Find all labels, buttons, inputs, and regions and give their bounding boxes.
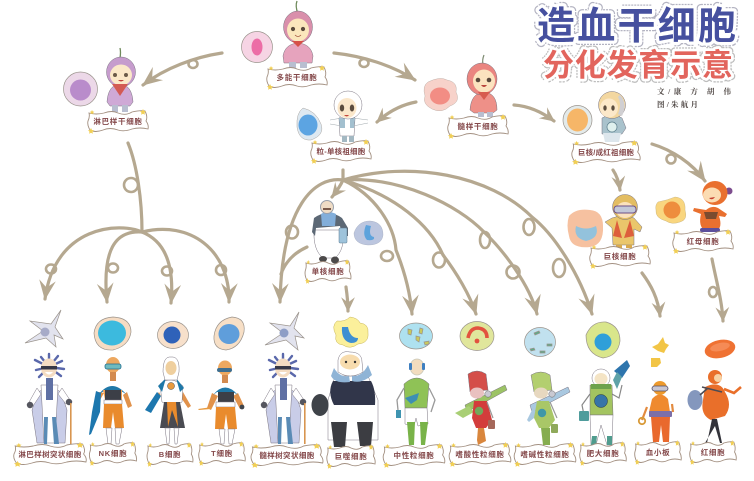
character: monocyte xyxy=(312,200,348,264)
character: NK cell xyxy=(89,357,132,444)
label: erythroblast xyxy=(673,229,733,254)
label: lymphoid dendritic xyxy=(14,442,86,467)
label: basophil xyxy=(514,442,576,467)
character: macrophage xyxy=(312,352,378,447)
arrow: multipotent to lymphoid xyxy=(143,53,222,85)
arrow tree: lymphoid lineages xyxy=(45,143,229,303)
cell: lymphoid dendritic xyxy=(25,310,63,347)
label: B: B细胞 xyxy=(159,449,181,459)
arrow: progenitor to mast cell xyxy=(343,171,592,314)
character: erythroblast xyxy=(693,181,732,232)
label: NK xyxy=(89,441,137,466)
label: mep xyxy=(572,140,640,165)
label: erythroblast: 红母细胞 xyxy=(687,236,719,246)
label: mast xyxy=(580,441,626,466)
label: myeloid stem xyxy=(448,114,508,139)
stem cell: granulocyte-monocyte progenitor xyxy=(297,108,322,140)
character: B cell xyxy=(145,357,191,444)
arrow: erythroblast to red cell xyxy=(709,259,723,321)
label: basophil: 嗜碱性粒细胞 xyxy=(520,449,570,459)
label: eosinophil xyxy=(449,442,511,467)
label: gmp xyxy=(311,139,371,164)
cell: eosinophil xyxy=(460,322,494,350)
character: eosinophil xyxy=(455,371,507,445)
arrow: progenitor to neutrophil xyxy=(343,180,412,314)
character: megakaryocyte-erythroid progenitor xyxy=(598,92,626,142)
label: monocyte: 单核细胞 xyxy=(312,266,344,276)
cell: red blood cell xyxy=(703,337,737,361)
label: B xyxy=(147,442,193,467)
stem cell: myeloid xyxy=(424,78,458,111)
character: multipotent stem cell xyxy=(283,1,313,68)
cell: T xyxy=(214,317,244,350)
label: mep: 巨核/成红祖细胞 xyxy=(578,147,634,157)
arrow: multipotent to myeloid xyxy=(334,53,415,80)
cell: B xyxy=(158,322,188,348)
arrow: monocyte to macrophage xyxy=(346,287,348,311)
label: multipotent: 多能干细胞 xyxy=(276,72,318,82)
author credits: 图/朱航月 xyxy=(657,99,698,109)
cell: erythroblast xyxy=(656,197,686,223)
label: lymphoid stem xyxy=(88,109,148,134)
label: macrophage: 巨噬细胞 xyxy=(335,451,367,461)
character: myeloid stem cell xyxy=(467,55,497,117)
arrow: myeloid to MEP xyxy=(514,105,554,121)
label: platelet xyxy=(635,440,681,465)
character: granulocyte-monocyte progenitor xyxy=(330,91,368,142)
label: megakaryocyte xyxy=(590,244,650,269)
label: eosinophil: 嗜酸性粒细胞 xyxy=(455,449,505,459)
label: multipotent xyxy=(267,65,327,90)
cell: macrophage xyxy=(334,317,368,347)
stem cell: lymphoid xyxy=(64,72,98,106)
label: lymphoid stem: 淋巴样干细胞 xyxy=(93,116,143,126)
label: red cell: 红细胞 xyxy=(701,447,725,457)
label: T xyxy=(199,441,245,466)
label: neutrophil: 中性粒细胞 xyxy=(394,450,434,460)
arrow: progenitor to eosinophil xyxy=(343,180,476,314)
arrow: MEP to megakaryocyte xyxy=(613,170,620,190)
label: mast: 肥大细胞 xyxy=(587,448,619,458)
character: platelet xyxy=(639,381,673,442)
label: T: T细胞 xyxy=(211,448,233,458)
arrow: megakaryocyte to platelet xyxy=(642,273,660,316)
arrow: MEP to erythroblast xyxy=(652,144,705,181)
label: myeloid stem: 髓样干细胞 xyxy=(458,121,498,131)
character: basophil xyxy=(527,372,570,445)
author credits: 文/康 方 胡 伟 xyxy=(657,86,732,96)
label: myeloid dendritic: 髓样树突状细胞 xyxy=(259,450,315,460)
character: neutrophil xyxy=(396,359,435,445)
cell: monocyte xyxy=(354,221,383,245)
label: red cell xyxy=(690,440,736,465)
cell: myeloid dendritic xyxy=(265,312,304,350)
label: platelet: 血小板 xyxy=(646,447,670,457)
character: myeloid dendritic cell xyxy=(261,354,306,444)
arrow: progenitor to basophil xyxy=(343,180,537,314)
title: 分化发育示意 xyxy=(543,40,733,85)
character: lymphoid stem cell xyxy=(106,48,136,112)
label: megakaryocyte: 巨核细胞 xyxy=(604,251,636,261)
arrow: progenitor to myeloid dendritic xyxy=(280,170,343,302)
character: T cell xyxy=(198,360,244,444)
cell: basophil xyxy=(524,328,556,356)
character: lymphoid dendritic cell xyxy=(27,354,72,444)
character: red blood cell xyxy=(688,370,741,443)
character: megakaryocyte xyxy=(605,194,642,248)
title xyxy=(537,0,736,85)
title: 分化发育示意 xyxy=(543,40,733,85)
cells: platelets xyxy=(651,337,669,367)
label: monocyte xyxy=(305,259,351,284)
stem cell: megakaryocyte-erythroid progenitor xyxy=(563,106,592,134)
label: lymphoid dendritic: 淋巴样树突状细胞 xyxy=(18,449,82,459)
author credits xyxy=(657,86,732,109)
cell: megakaryocyte xyxy=(568,210,603,247)
cell: mast xyxy=(586,322,620,358)
arrow: monocyte to myeloid dendritic xyxy=(281,247,307,274)
label: gmp: 粒-单核祖细胞 xyxy=(317,146,366,156)
cell: neutrophil xyxy=(400,323,432,349)
arrow: myeloid to granulocyte-monocyte xyxy=(377,102,416,122)
label: NK: NK细胞 xyxy=(99,448,127,458)
label: neutrophil xyxy=(383,443,445,468)
arrow: progenitor to monocyte xyxy=(332,180,343,197)
character: mast cell xyxy=(579,360,630,445)
stem cell: multipotent xyxy=(242,32,272,62)
title: 分化发育示意 xyxy=(543,40,733,85)
label: myeloid dendritic xyxy=(251,443,323,468)
label: macrophage xyxy=(327,444,375,469)
cell: NK xyxy=(94,317,131,350)
